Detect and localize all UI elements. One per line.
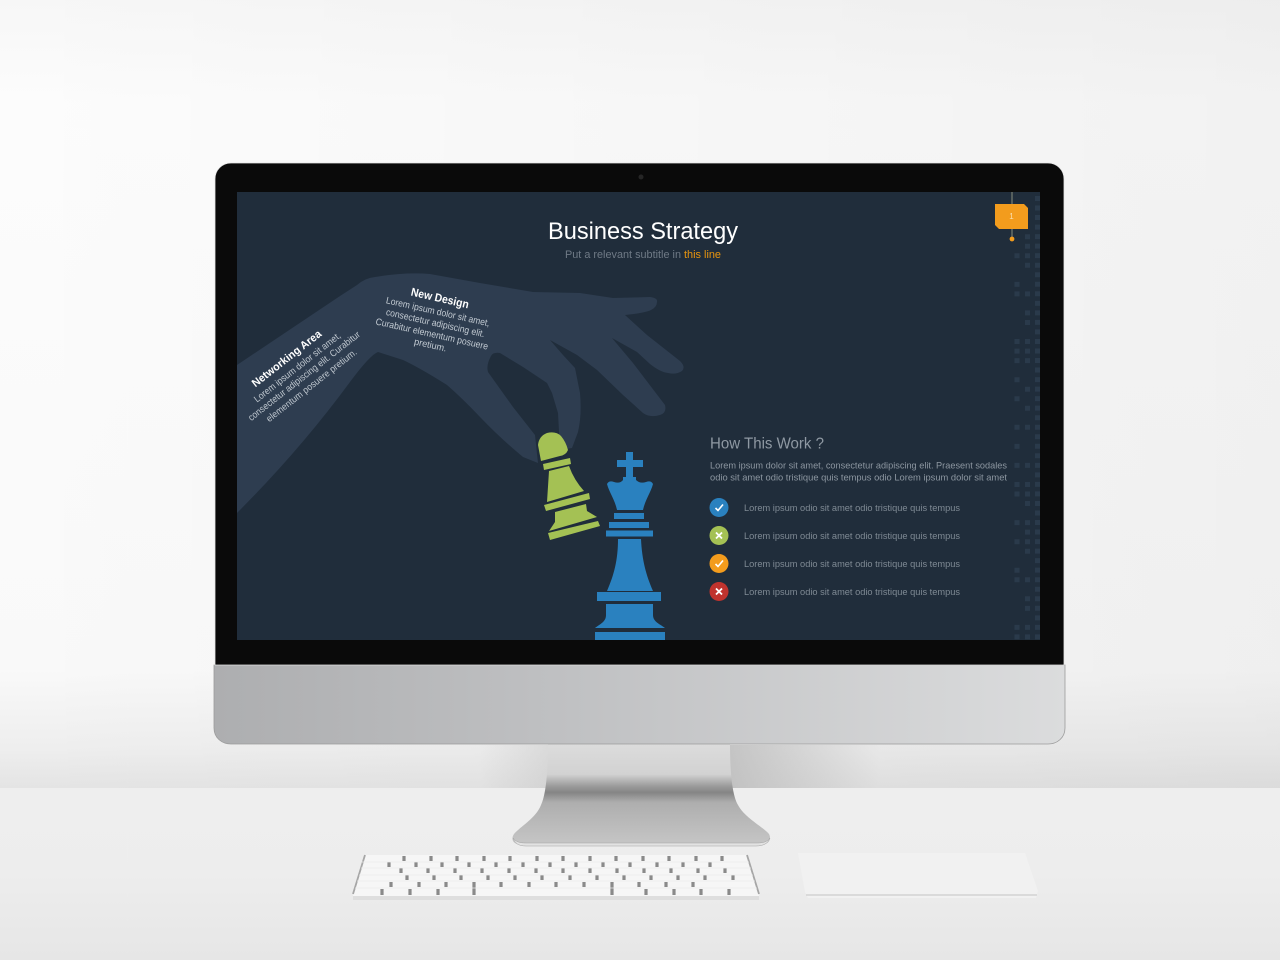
title: Business Strategy — [548, 218, 738, 245]
list item 2 — [710, 526, 961, 545]
list item 1 — [710, 498, 961, 517]
text on hand: New Design: pretium. — [413, 337, 448, 355]
list item 3 — [710, 554, 961, 573]
slide screen — [231, 192, 1040, 640]
page number badge — [995, 192, 1028, 241]
text on hand: Networking Area: Lorem ipsum dolor sit amet, — [252, 331, 343, 405]
how this work heading: How This Work ? — [710, 436, 824, 452]
text on hand: Networking Area: consectetur adipiscing elit. Curabitur — [246, 329, 363, 424]
monitor chin — [214, 665, 1065, 744]
monitor stand — [512, 744, 770, 846]
green pawn — [538, 432, 600, 540]
trackpad — [798, 853, 1038, 898]
list item 2: Lorem ipsum odio sit amet odio tristique quis tempus — [744, 531, 961, 541]
text on hand: New Design — [372, 280, 497, 363]
monitor bezel — [215, 163, 1064, 665]
keyboard — [353, 855, 759, 900]
text on hand: New Design: Curabitur elementum posuere — [374, 317, 489, 353]
description paragraph: odio sit amet odio tristique quis tempus odio Lorem ipsum dolor sit amet — [710, 472, 1007, 484]
text on hand: New Design: New Design — [410, 287, 470, 311]
description paragraph — [710, 460, 1007, 484]
text on hand: Networking Area: Networking Area — [250, 328, 325, 390]
monitor — [214, 163, 1065, 846]
camera — [638, 174, 644, 180]
decorative dot column pattern — [1014, 196, 1038, 640]
list item 4 — [710, 582, 961, 601]
list item 1: Lorem ipsum odio sit amet odio tristique quis tempus — [744, 503, 961, 513]
text on hand: Networking Area: elementum posuere pretium. — [264, 347, 359, 425]
page number badge: 1 — [1009, 212, 1014, 221]
hand silhouette — [237, 273, 684, 513]
text on hand: New Design: consectetur adipiscing elit. — [385, 307, 486, 340]
text on hand: New Design: Lorem ipsum dolor sit amet, — [385, 295, 491, 329]
subtitle: Put a relevant subtitle in — [565, 249, 681, 261]
description paragraph: Lorem ipsum dolor sit amet, consectetur adipiscing elit. Praesent sodales — [710, 460, 1007, 472]
blue king — [595, 452, 665, 640]
subtitle: this line — [684, 249, 721, 261]
list item 3: Lorem ipsum odio sit amet odio tristique quis tempus — [744, 559, 961, 569]
list item 4: Lorem ipsum odio sit amet odio tristique quis tempus — [744, 587, 961, 597]
